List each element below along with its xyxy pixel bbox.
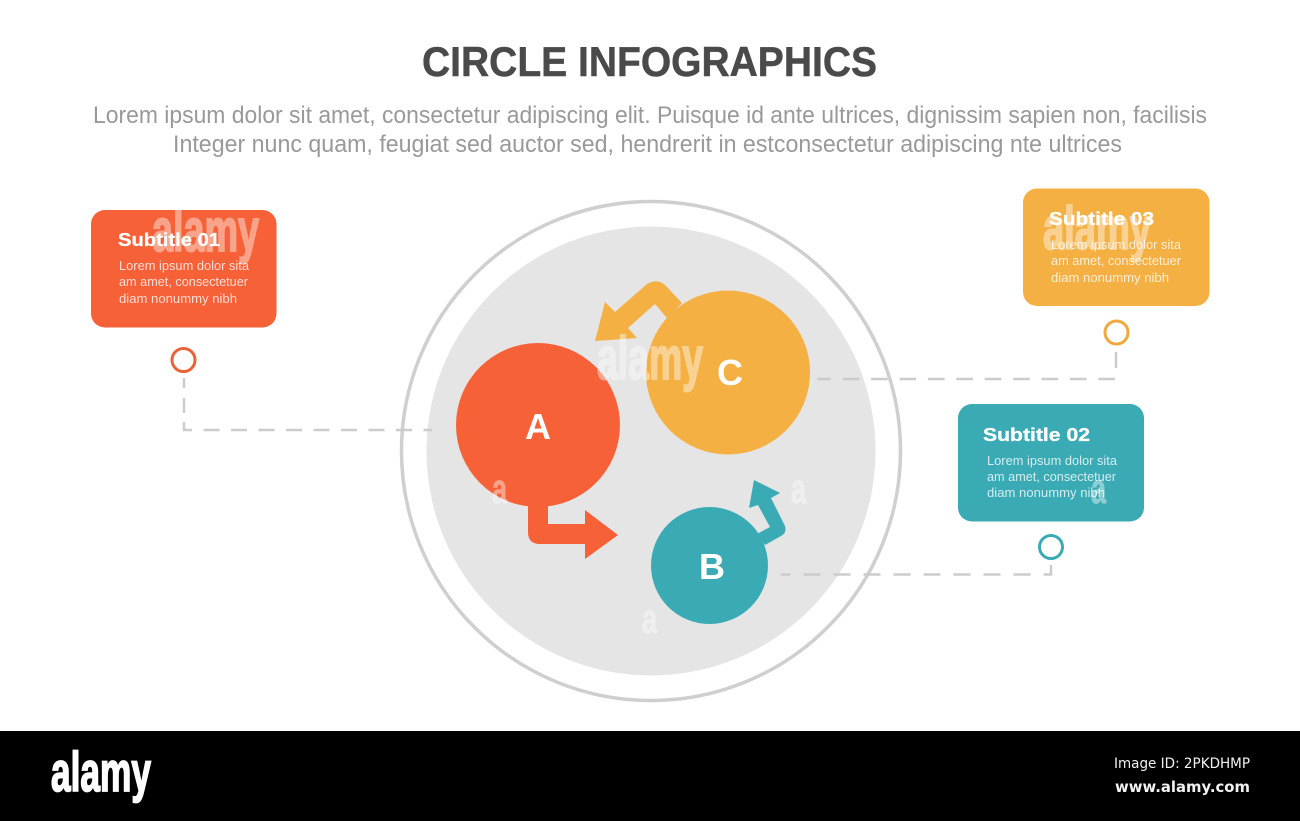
watermarks: a — [642, 595, 657, 642]
website: www.alamy.com — [1115, 778, 1250, 796]
footer bar — [0, 731, 1300, 821]
card: Subtitle 03: diam nonummy nibh — [1051, 271, 1169, 285]
node A: A — [525, 406, 551, 447]
watermarks: a — [1091, 465, 1106, 512]
card: Subtitle 02: diam nonummy nibh — [987, 486, 1105, 500]
card: Subtitle 03: Lorem ipsum dolor sita — [1051, 238, 1181, 252]
connector: C to Subtitle 03 — [817, 352, 1116, 379]
card: Subtitle 01: diam nonummy nibh — [119, 292, 237, 306]
card: Subtitle 03: am amet, consectetuer — [1051, 254, 1181, 268]
node C — [646, 290, 810, 454]
footer logo: alamy — [51, 740, 151, 803]
card: Subtitle 02: Subtitle 02 — [983, 425, 1090, 445]
intro text: Integer nunc quam, feugiat sed auctor sed, hendrerit in estconsectetur adipiscing nte ultrices — [173, 131, 1122, 158]
inner grey disc — [426, 226, 876, 676]
card: Subtitle 02: am amet, consectetuer — [987, 470, 1116, 484]
node B: B — [699, 546, 725, 587]
main circle diagram — [402, 202, 900, 700]
node A — [456, 343, 620, 507]
watermarks: a — [492, 465, 507, 512]
card: Subtitle 01: am amet, consectetuer — [119, 275, 248, 289]
card: Subtitle 01: Subtitle 01 — [118, 230, 220, 250]
outer ring — [402, 202, 900, 700]
watermarks: alamy — [597, 325, 703, 392]
arrow: B to C — [749, 480, 786, 545]
watermarks: a — [791, 465, 806, 512]
image id: Image ID: 2PKDHMP — [1114, 756, 1250, 772]
arrow: A to B — [528, 500, 618, 559]
title: CIRCLE INFOGRAPHICS — [422, 38, 877, 85]
watermarks — [152, 195, 1151, 642]
node B — [651, 507, 768, 624]
marker: Subtitle 02 — [1040, 536, 1062, 558]
marker: Subtitle 01 — [172, 348, 195, 372]
marker: Subtitle 03 — [1105, 321, 1128, 344]
connector: A to Subtitle 01 — [184, 378, 432, 430]
intro text — [93, 102, 1207, 158]
card: Subtitle 02: Lorem ipsum dolor sita — [987, 454, 1117, 468]
node C: C — [717, 352, 743, 393]
connector: B to Subtitle 02 — [781, 565, 1051, 574]
card: Subtitle 01 — [91, 210, 276, 328]
watermarks: alamy — [1043, 195, 1151, 262]
watermarks: alamy — [152, 197, 259, 264]
arrow: C to A — [595, 281, 682, 341]
card: Subtitle 01: Lorem ipsum dolor sita — [119, 259, 249, 273]
intro text: Lorem ipsum dolor sit amet, consectetur adipiscing elit. Puisque id ante ultrices, dignissim sapien non, facilisis — [93, 102, 1207, 129]
card: Subtitle 02 — [958, 404, 1144, 522]
card: Subtitle 03: Subtitle 03 — [1049, 209, 1154, 229]
card: Subtitle 03 — [1023, 188, 1210, 306]
